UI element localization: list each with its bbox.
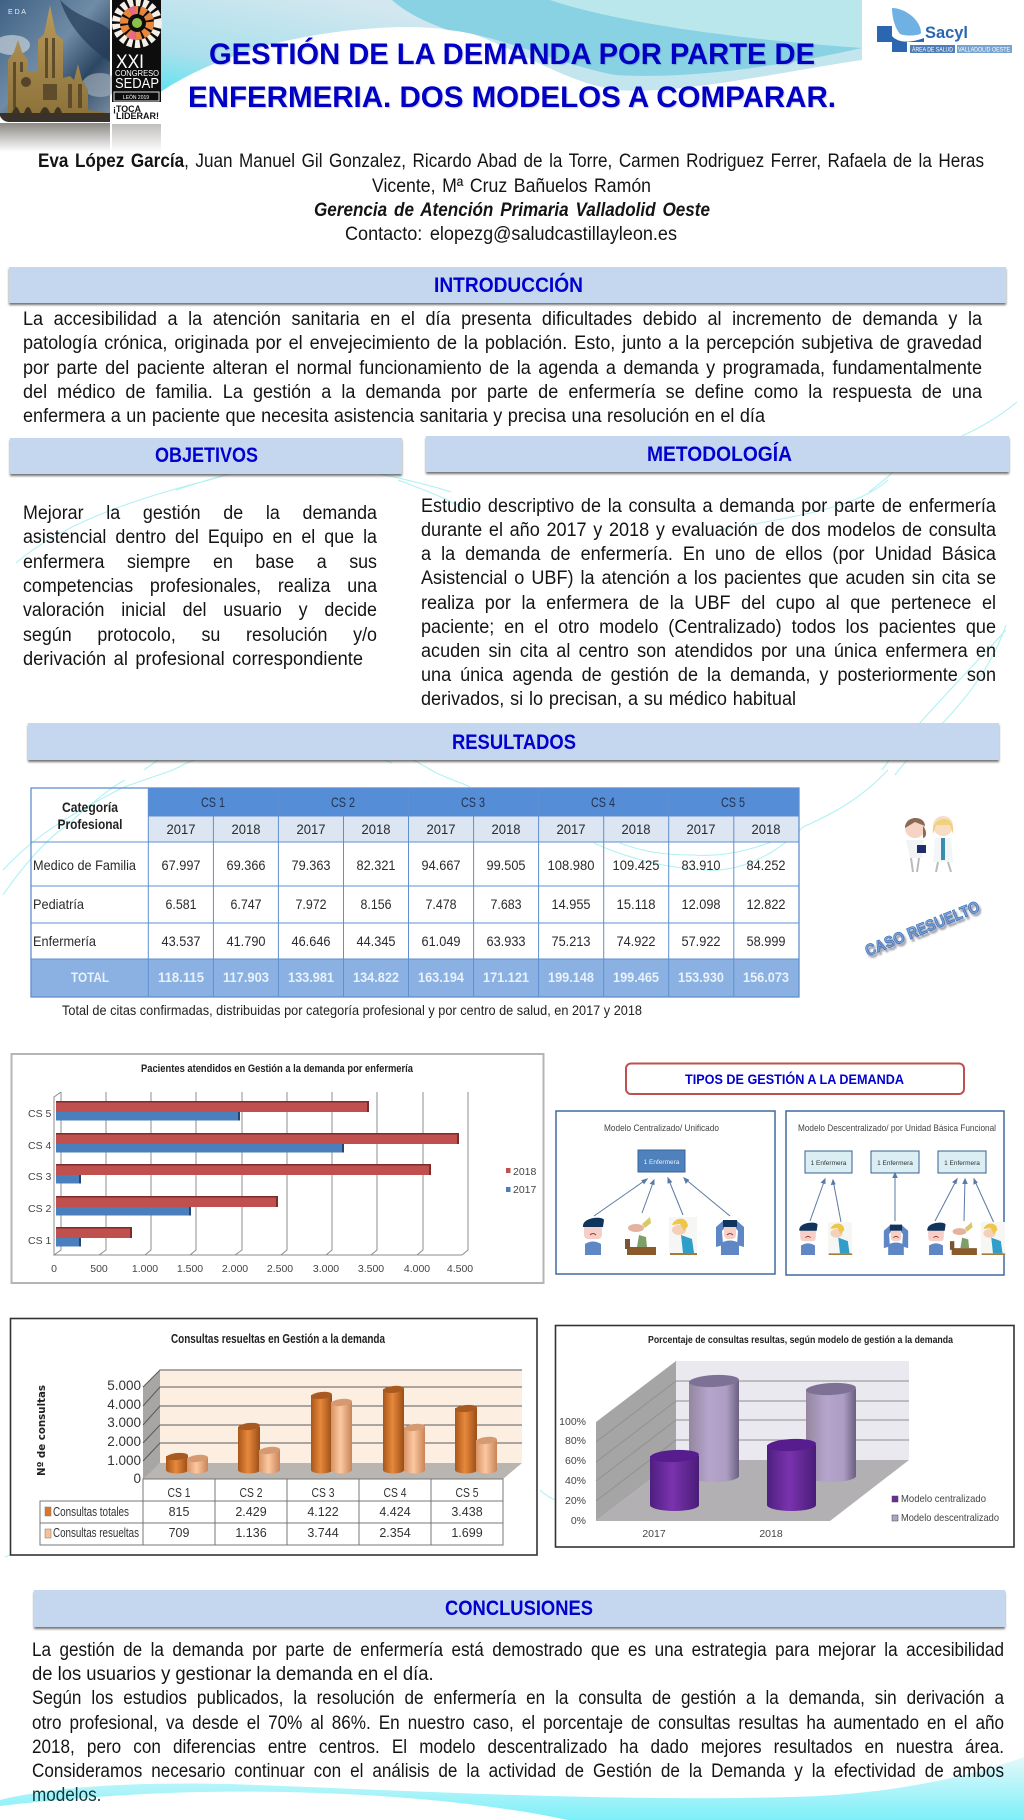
photo: León cathedral: E D A — [8, 9, 26, 16]
panel: modelo descentralizado — [786, 1111, 1005, 1275]
top wave background — [159, 0, 862, 93]
table: citas confirmadas: 46.646 — [292, 933, 331, 949]
table: citas confirmadas: Categoría — [62, 799, 118, 815]
authors block — [38, 151, 984, 245]
chart: consultas resueltas: CS 2 — [240, 1486, 263, 1500]
chart: consultas resueltas: 2.429 — [235, 1505, 267, 1519]
text: conclusiones: de los usuarios y gestionar la demanda en el día. — [32, 1664, 434, 1684]
authors block: Contacto: elopezg@saludcastillayleon.es — [345, 224, 677, 245]
logo: Sacyl: VALLADOLID OESTE — [958, 48, 1010, 54]
table: citas confirmadas: 58.999 — [746, 933, 786, 949]
heading: objetivos — [10, 438, 402, 474]
heading: resultados — [28, 723, 999, 760]
chart: porcentaje de consultas resueltas: Modelo descentralizado — [901, 1512, 999, 1524]
chart: consultas resueltas: CS 3 — [312, 1486, 335, 1500]
chart: consultas resueltas: 709 — [169, 1526, 189, 1540]
table: citas confirmadas: 2017 — [166, 821, 196, 837]
table: citas confirmadas: 15.118 — [616, 896, 656, 912]
table: citas confirmadas: 2017 — [556, 821, 586, 837]
chart: pacientes atendidos: 1.500 — [177, 1263, 203, 1275]
heading: introducción — [9, 267, 1006, 303]
table: citas confirmadas: 2018 — [362, 821, 391, 837]
table: citas confirmadas: CS 2 — [331, 794, 355, 810]
table: citas confirmadas: 75.213 — [552, 933, 591, 949]
table: citas confirmadas: 109.425 — [612, 857, 660, 873]
table: citas confirmadas: 117.903 — [223, 969, 269, 985]
table: citas confirmadas: 108.980 — [548, 857, 595, 873]
chart: consultas resueltas: Consultas resueltas en Gestión a la demanda — [171, 1331, 386, 1346]
logo: Sacyl: ÁREA DE SALUD — [912, 46, 954, 54]
chart: consultas resueltas: 4.122 — [307, 1505, 339, 1519]
table: citas confirmadas: 44.345 — [356, 933, 396, 949]
table: citas confirmadas: 118.115 — [158, 969, 204, 985]
text: introducción: La accesibilidad a la atención sanitaria en el día presenta dificultades debido al incremento de demanda y la — [23, 309, 982, 330]
table: citas confirmadas: TOTAL — [71, 969, 109, 985]
text: conclusiones — [32, 1640, 1004, 1806]
heading: metodología — [426, 436, 1009, 472]
table: citas confirmadas: 14.955 — [552, 896, 591, 912]
heading: conclusiones — [34, 1590, 1005, 1627]
table: citas confirmadas: 2017 — [686, 821, 716, 837]
panel: modelo centralizado: Modelo Centralizado/ Unificado — [604, 1123, 719, 1134]
table: citas confirmadas: Profesional — [58, 816, 122, 832]
chart: pacientes atendidos — [12, 1054, 544, 1283]
chart: consultas resueltas: 815 — [169, 1505, 189, 1519]
text: metodología: durante el año 2017 y 2018 y evaluación de dos modelos de consulta — [421, 520, 996, 541]
heading: objetivos: OBJETIVOS — [155, 444, 258, 467]
poster: XXI Congreso SEDAP: LIDERAR! — [116, 111, 159, 121]
chart: consultas resueltas: 3.000 — [107, 1415, 141, 1430]
text: objetivos: enfermera siempre en base a sus — [23, 552, 377, 573]
chart: pacientes atendidos: CS 4 — [28, 1140, 52, 1152]
text: conclusiones: 2018, pero con diferencias entre centros. El modelo descentralizado ha dado mejores resultados en nuestra área. — [32, 1736, 1004, 1758]
table: citas confirmadas: CS 3 — [461, 794, 485, 810]
table: citas confirmadas: 134.822 — [353, 969, 399, 985]
chart: consultas resueltas: 1.136 — [235, 1526, 267, 1540]
table: citas confirmadas: 41.790 — [226, 933, 266, 949]
panel: modelo centralizado: 1 Enfermera — [644, 1159, 680, 1166]
chart: consultas resueltas: 4.424 — [379, 1505, 411, 1519]
chart: pacientes atendidos: CS 5 — [28, 1108, 52, 1120]
chart: consultas resueltas: 3.744 — [307, 1526, 339, 1540]
poster: XXI Congreso SEDAP: LEÓN 2019 — [123, 94, 149, 101]
table: citas confirmadas: 99.505 — [486, 857, 526, 873]
text: metodología: Asistencial o UBF) la atención a los pacientes que acuden sin cita se — [421, 568, 996, 589]
table: citas confirmadas: 69.366 — [226, 857, 266, 873]
panel: modelo descentralizado: 1 Enfermera — [877, 1160, 913, 1167]
text: metodología: realiza por la enfermera de la UBF del cupo al que pertenece el — [421, 593, 996, 614]
chart: porcentaje de consultas resueltas: Porcentaje de consultas resultas, según modelo de gestión a la demanda — [648, 1334, 953, 1346]
table: citas confirmadas: 57.922 — [682, 933, 721, 949]
chart: consultas resueltas: Nº de consultas — [35, 1385, 48, 1476]
poster: XXI Congreso SEDAP: CONGRESO — [115, 68, 159, 78]
heading: conclusiones: CONCLUSIONES — [445, 1597, 593, 1620]
text: metodología: derivados, si lo precisan, a su médico habitual — [421, 689, 796, 710]
table: citas confirmadas: 84.252 — [746, 857, 786, 873]
chart: consultas resueltas: 1.699 — [451, 1526, 483, 1540]
chart: consultas resueltas — [10, 1318, 537, 1555]
chart: consultas resueltas: 1.000 — [107, 1453, 141, 1468]
text: metodología: paciente; en el otro modelo (Centralizado) todos los pacientes que — [421, 617, 996, 638]
chart: pacientes atendidos: 2018 — [513, 1166, 537, 1178]
table: citas confirmadas: 171.121 — [483, 969, 529, 985]
table: citas confirmadas: 79.363 — [292, 857, 331, 873]
table: citas confirmadas: 63.933 — [486, 933, 526, 949]
chart: consultas resueltas: Consultas totales — [53, 1505, 129, 1519]
table: citas confirmadas: 7.683 — [490, 896, 522, 912]
text: objetivos: valoración inicial del usuario y decide — [23, 600, 377, 621]
logo: Sacyl: Sacyl — [925, 23, 968, 42]
table: citas confirmadas: 12.098 — [682, 896, 721, 912]
logo: Sacyl — [877, 8, 1012, 54]
table: citas confirmadas: 2017 — [296, 821, 326, 837]
chart: consultas resueltas: 0 — [133, 1471, 141, 1486]
table: citas confirmadas: Enfermería — [33, 933, 96, 949]
table: citas confirmadas: 67.997 — [162, 857, 201, 873]
heading: tipos de gestión a la demanda: TIPOS DE GESTIÓN A LA DEMANDA — [685, 1070, 904, 1087]
text: introducción: del médico de familia. La gestión a la demanda por parte de enfermería se define como la respuesta de una — [23, 382, 982, 403]
heading: metodología: METODOLOGÍA — [647, 443, 792, 466]
chart: consultas resueltas: CS 1 — [168, 1486, 191, 1500]
chart: pacientes atendidos: 3.000 — [313, 1263, 339, 1275]
poster: XXI Congreso SEDAP — [112, 0, 161, 152]
text: metodología: una única agenda de gestión de la demanda, y posteriormente son — [421, 665, 996, 686]
chart: pacientes atendidos: Pacientes atendidos en Gestión a la demanda por enfermería — [141, 1063, 414, 1075]
table: citas confirmadas: 61.049 — [422, 933, 461, 949]
table: citas confirmadas: 6.581 — [166, 896, 197, 912]
chart: porcentaje de consultas resueltas — [556, 1326, 1014, 1547]
chart: porcentaje de consultas resueltas: 20% — [565, 1495, 586, 1507]
text: conclusiones: otro profesional, va desde el 70% al 86%. En nuestro caso, el porcentaje de consultas resultas ha aumentado en el año — [32, 1712, 1004, 1734]
chart: consultas resueltas: 2.354 — [379, 1526, 411, 1540]
poster: XXI Congreso SEDAP: SEDAP — [115, 75, 159, 92]
text: metodología: Estudio descriptivo de la consulta a demanda por parte de enfermería — [421, 496, 996, 517]
heading: introducción: INTRODUCCIÓN — [434, 273, 583, 297]
text: metodología — [421, 496, 996, 710]
table: citas confirmadas: CS 1 — [201, 794, 225, 810]
table: citas confirmadas: 74.922 — [616, 933, 656, 949]
chart: pacientes atendidos: CS 3 — [28, 1171, 52, 1183]
table: citas confirmadas: 6.747 — [230, 896, 262, 912]
chart: porcentaje de consultas resueltas: 2018 — [759, 1528, 783, 1540]
chart: pacientes atendidos: 2.000 — [222, 1263, 248, 1275]
chart: consultas resueltas: 3.438 — [451, 1505, 483, 1519]
table: citas confirmadas: 7.972 — [296, 896, 327, 912]
title: ENFERMERIA. DOS MODELOS A COMPARAR. — [188, 81, 836, 114]
chart: pacientes atendidos: CS 1 — [28, 1235, 52, 1247]
chart: consultas resueltas: 2.000 — [107, 1434, 141, 1449]
title: GESTIÓN DE LA DEMANDA POR PARTE DE — [209, 37, 815, 71]
table caption: Total de citas confirmadas, distribuidas por categoría profesional y por centro de salud, en 2017 y 2018 — [62, 1002, 642, 1018]
table: citas confirmadas: CS 5 — [721, 794, 745, 810]
text: conclusiones: Según los estudios publicados, la resolución de enfermería en la consulta de gestión a la demanda, sin derivación a — [32, 1688, 1004, 1708]
text: conclusiones: La gestión de la demanda por parte de enfermería está demostrado que es una estrategia para mejorar la accesibilidad — [32, 1640, 1004, 1660]
table: citas confirmadas: 83.910 — [682, 857, 721, 873]
authors block: Eva López García, Juan Manuel Gil Gonzalez, Ricardo Abad de la Torre, Carmen Rodriguez Ferrer, Rafaela de la Heras — [38, 151, 984, 172]
chart: pacientes atendidos: 500 — [90, 1263, 108, 1275]
table: citas confirmadas: 2018 — [752, 821, 781, 837]
heading: tipos de gestión a la demanda — [626, 1064, 964, 1094]
table: citas confirmadas: CS 4 — [591, 794, 615, 810]
chart: porcentaje de consultas resueltas: 100% — [559, 1416, 586, 1428]
text: objetivos — [23, 503, 378, 670]
authors block: Vicente, Mª Cruz Bañuelos Ramón — [372, 176, 651, 197]
text: introducción — [23, 309, 982, 427]
table: citas confirmadas: 7.478 — [426, 896, 457, 912]
panel: modelo descentralizado: 1 Enfermera — [944, 1160, 980, 1167]
chart: consultas resueltas: CS 4 — [384, 1486, 407, 1500]
chart: porcentaje de consultas resueltas: 80% — [565, 1435, 586, 1447]
title — [188, 37, 836, 114]
table: citas confirmadas: 199.148 — [548, 969, 594, 985]
bottom wave background — [0, 1757, 1024, 1820]
table: citas confirmadas: 133.981 — [288, 969, 334, 985]
chart: pacientes atendidos: 4.500 — [447, 1263, 473, 1275]
chart: pacientes atendidos: 1.000 — [132, 1263, 158, 1275]
chart: pacientes atendidos: 4.000 — [404, 1263, 430, 1275]
panel: modelo centralizado — [556, 1111, 775, 1274]
chart: consultas resueltas: 4.000 — [107, 1397, 141, 1412]
text: introducción: por parte del paciente alteran el normal funcionamiento de la agenda a demanda y programada, fundamentalmente — [23, 358, 982, 379]
chart: pacientes atendidos: 2017 — [513, 1184, 537, 1196]
icon: two nurses — [905, 816, 953, 872]
chart: porcentaje de consultas resueltas: 40% — [565, 1475, 586, 1487]
poster: XXI Congreso SEDAP: XXI — [116, 52, 144, 73]
text: objetivos: derivación al profesional correspondiente — [23, 649, 363, 670]
text: objetivos: competencias profesionales, realiza una — [23, 576, 377, 597]
chart: pacientes atendidos: 0 — [51, 1263, 57, 1275]
table: citas confirmadas: 43.537 — [162, 933, 201, 949]
photo: León cathedral — [0, 0, 118, 152]
table: citas confirmadas: 199.465 — [613, 969, 659, 985]
table: citas confirmadas: 156.073 — [743, 969, 789, 985]
table: citas confirmadas: 82.321 — [356, 857, 396, 873]
text: metodología: acuden sin cita al centro son atendidos por una única enfermera en — [421, 641, 996, 662]
panel: modelo descentralizado: 1 Enfermera — [811, 1160, 847, 1167]
text: objetivos: asistencial dentro del Equipo en el que la — [23, 527, 377, 548]
text: metodología: a la demanda de enfermería. En uno de ellos (por Unidad Básica — [421, 544, 996, 565]
chart: consultas resueltas: CS 5 — [456, 1486, 479, 1500]
chart: porcentaje de consultas resueltas: Modelo centralizado — [901, 1493, 986, 1505]
table: citas confirmadas — [31, 788, 799, 997]
chart: pacientes atendidos: 3.500 — [358, 1263, 384, 1275]
text: conclusiones: Consideramos necesario continuar con el análisis de la actividad de Gestión de la Demanda y la efectividad de ambos — [32, 1760, 1004, 1782]
authors block: Gerencia de Atención Primaria Valladolid Oeste — [314, 200, 710, 221]
table: citas confirmadas: 2018 — [492, 821, 521, 837]
chart: consultas resueltas: 5.000 — [107, 1378, 141, 1393]
table: citas confirmadas: 2018 — [232, 821, 261, 837]
table: citas confirmadas: 12.822 — [746, 896, 786, 912]
table: citas confirmadas: 2018 — [622, 821, 651, 837]
table: citas confirmadas: Medico de Familia — [33, 857, 136, 873]
heading: resultados: RESULTADOS — [452, 731, 576, 754]
table: citas confirmadas: 153.930 — [678, 969, 724, 985]
table: citas confirmadas: Pediatría — [33, 896, 84, 912]
text: introducción: enfermera a un paciente que necesita asistencia sanitaria y precisa una resolución en el día — [23, 406, 765, 427]
text: conclusiones: modelos. — [32, 1784, 101, 1806]
table: citas confirmadas: 2017 — [426, 821, 456, 837]
table: citas confirmadas: 94.667 — [422, 857, 461, 873]
chart: consultas resueltas: Consultas resueltas — [53, 1526, 139, 1540]
chart: pacientes atendidos: CS 2 — [28, 1203, 52, 1215]
panel: modelo descentralizado: Modelo Descentralizado/ por Unidad Básica Funcional — [798, 1123, 996, 1134]
chart: porcentaje de consultas resueltas: 0% — [571, 1515, 586, 1527]
poster: XXI Congreso SEDAP: ¡TOCA — [113, 104, 141, 114]
text: objetivos: Mejorar la gestión de la demanda — [23, 503, 377, 524]
table: citas confirmadas: 8.156 — [360, 896, 392, 912]
table: citas confirmadas: 163.194 — [418, 969, 464, 985]
chart: porcentaje de consultas resueltas: 2017 — [642, 1528, 666, 1540]
callout: caso resuelto: CASO RESUELTO — [863, 899, 982, 960]
chart: pacientes atendidos: 2.500 — [267, 1263, 293, 1275]
text: objetivos: según protocolo, su resolución y/o — [23, 625, 377, 646]
text: introducción: patología crónica, originada por el envejecimiento de la población. Esto, junto a la percepción subjetiva de gravedad — [23, 333, 982, 354]
chart: porcentaje de consultas resueltas: 60% — [565, 1455, 586, 1467]
